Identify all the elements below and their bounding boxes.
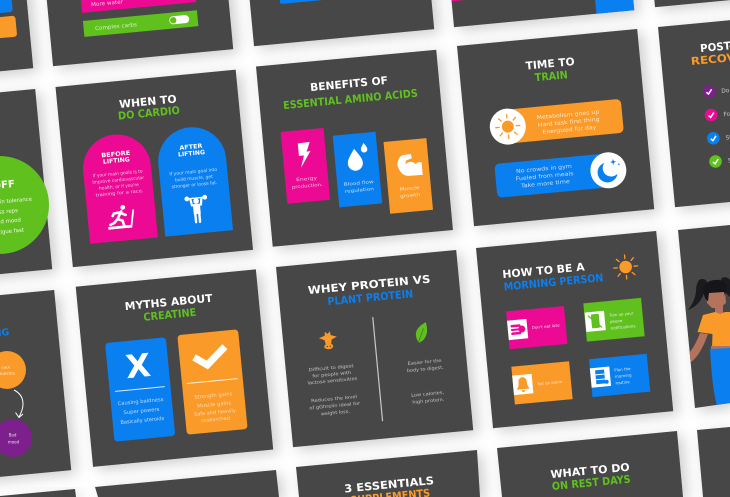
panel: how to be a morning person bbox=[476, 231, 673, 428]
blue myth card: Causing baldness bbox=[117, 397, 164, 407]
blue tile bbox=[592, 0, 634, 14]
purple circle bbox=[0, 419, 32, 457]
green row: complex carbs bbox=[83, 10, 198, 37]
panel: mood cycle card bbox=[0, 290, 71, 487]
blue arch: after lifting: AFTER bbox=[179, 143, 203, 152]
magenta tile: energy production bbox=[281, 128, 330, 204]
heading: 3 ESSENTIALS bbox=[344, 474, 435, 496]
icon: water drops bbox=[346, 143, 369, 171]
panel: day off card bbox=[0, 89, 52, 286]
purple circle text: Bad bbox=[9, 432, 17, 438]
heading: BENEFITS OF bbox=[310, 74, 388, 94]
green row: complex carbs: Complex carbs bbox=[95, 22, 137, 32]
orange fact card: Muscle gains bbox=[197, 400, 232, 410]
panel: bottom card bbox=[95, 470, 279, 497]
orange pill: morning bbox=[488, 98, 624, 146]
panel: what to do on rest days bbox=[497, 431, 683, 497]
tile: set an alarm: Set an alarm bbox=[537, 379, 563, 386]
orange pill: morning: Energized for day bbox=[542, 125, 597, 136]
right text bbox=[406, 358, 447, 406]
blue arch: after lifting: LIFTING bbox=[178, 149, 205, 159]
left text: Difficult to digest bbox=[308, 363, 354, 373]
illustration: woman with pigtails bbox=[688, 277, 730, 407]
heading: WHEY PROTEIN VS bbox=[307, 273, 431, 297]
blue tile: blood flow regulation: Blood flow bbox=[344, 179, 374, 188]
magenta tile bbox=[449, 0, 467, 1]
panel: far top-right cropped card bbox=[638, 0, 730, 7]
tile: turn up phone notifications: notifications bbox=[610, 323, 636, 331]
panel: top-centre cropped card bbox=[237, 0, 434, 46]
panel: benefits of essential amino acids bbox=[256, 50, 453, 247]
panel: 3 essentials bbox=[296, 450, 480, 497]
icon: weightlifter bbox=[184, 195, 209, 223]
divider line bbox=[372, 317, 383, 421]
panel: bottom-right cropped card bbox=[697, 427, 730, 497]
magenta arch: before lifting bbox=[80, 131, 158, 244]
subheading: DO CARDIO bbox=[117, 104, 180, 123]
left text bbox=[306, 363, 361, 418]
icon: moon bbox=[589, 151, 628, 190]
white tile bbox=[356, 0, 382, 1]
orange fact card: Strength gains bbox=[194, 391, 233, 401]
magenta arch: before lifting: health, or if you're bbox=[99, 182, 139, 192]
left text: weight loss. bbox=[321, 409, 350, 417]
left text: Reduces the level bbox=[311, 394, 357, 404]
orange tile: muscle growth: Muscle bbox=[399, 185, 420, 193]
panel: carbs list card bbox=[36, 0, 233, 66]
blue myth card bbox=[105, 337, 175, 442]
panel: whey protein vs plant protein bbox=[276, 250, 473, 447]
subheading: ESSENTIAL AMINO ACIDS bbox=[283, 87, 418, 112]
orange tile bbox=[0, 16, 17, 41]
panel: post-workout recovery bbox=[658, 10, 730, 207]
tile: set an alarm bbox=[511, 361, 573, 405]
blue tile: blood flow regulation bbox=[333, 132, 382, 207]
icon: lightning bolt bbox=[298, 142, 312, 168]
blue pill: evening: No crowds in gym bbox=[516, 164, 572, 175]
purple circle text bbox=[8, 432, 20, 444]
orange fact card bbox=[177, 329, 248, 435]
tile: turn up phone notifications: phone bbox=[610, 318, 623, 324]
tile: plan the morning routine bbox=[589, 354, 650, 397]
tile: plan the morning routine: morning bbox=[615, 372, 632, 379]
panel: time to train bbox=[457, 29, 654, 226]
left text: for people with bbox=[312, 370, 352, 380]
panel: top-right cropped card bbox=[437, 0, 634, 27]
icon: flexed arm bbox=[396, 153, 423, 177]
heading: TIME TO bbox=[525, 55, 575, 73]
subheading: PLANT PROTEIN bbox=[327, 287, 414, 308]
left text: lactose sensitivities bbox=[307, 376, 358, 387]
blue arch: after lifting: build muscle, get bbox=[175, 174, 213, 183]
arrow bbox=[14, 390, 23, 418]
orange circle text bbox=[0, 364, 16, 376]
blue myth card: Super powers bbox=[123, 407, 160, 416]
right text: high protein. bbox=[412, 397, 445, 406]
tile: don't eat late bbox=[506, 306, 567, 349]
purple circle text: mood bbox=[8, 440, 20, 444]
blue pill: evening: Take more time bbox=[520, 179, 571, 190]
panel: when to do cardio bbox=[56, 70, 253, 267]
checklist bbox=[702, 81, 730, 168]
blue myth card: X bbox=[124, 346, 153, 386]
icon: sun bbox=[488, 107, 527, 146]
orange pill: morning: Hard task first thing bbox=[538, 117, 600, 129]
subheading: ON REST DAYS bbox=[551, 473, 631, 493]
blue arch: after lifting: If your main goal into bbox=[169, 167, 218, 177]
blue arch: after lifting bbox=[155, 124, 233, 237]
magenta arch: before lifting: If your main goals is to bbox=[92, 169, 143, 179]
heading: WHAT TO DO bbox=[550, 461, 630, 481]
icon: bell bbox=[515, 377, 530, 393]
heading: WHEN TO bbox=[119, 92, 177, 111]
panel: myths about creatine bbox=[76, 269, 273, 467]
panel: bottom-left cropped card bbox=[0, 489, 76, 497]
orange circle text: Lack bbox=[2, 364, 11, 370]
orange fact card: researched bbox=[201, 416, 230, 424]
green circle bbox=[0, 156, 49, 254]
subheading: MORNING PERSON bbox=[503, 271, 604, 294]
orange tile: muscle growth: growth bbox=[400, 192, 421, 200]
subheading: TRAIN bbox=[534, 68, 568, 84]
right text: body to digest. bbox=[407, 365, 444, 374]
circle list bbox=[0, 196, 33, 236]
orange tile: muscle growth bbox=[384, 138, 433, 214]
icon: leaf bbox=[415, 322, 428, 344]
orange pill: morning: Metabolism goes up bbox=[536, 109, 600, 121]
left text: of gGhrelin ideal for bbox=[309, 401, 361, 411]
blue pill: evening bbox=[494, 151, 628, 199]
magenta arch: before lifting: LIFTING bbox=[103, 156, 130, 166]
tile: plan the morning routine: Plan the bbox=[614, 366, 631, 373]
tile: don't eat late: Don't eat late bbox=[532, 322, 560, 330]
magenta arch: before lifting: training for a race. bbox=[95, 188, 144, 199]
blue myth card: Basically steroids bbox=[120, 416, 165, 426]
tile: plan the morning routine: routine bbox=[615, 379, 630, 385]
magenta arch: before lifting: BEFORE bbox=[101, 150, 131, 159]
magenta tile: energy production: Energy bbox=[296, 175, 318, 183]
tile: turn up phone notifications: Turn up your bbox=[608, 310, 634, 318]
heading: HOW TO BE A bbox=[502, 260, 586, 281]
magenta row: more water bbox=[79, 0, 196, 13]
magenta tile: energy production: production. bbox=[292, 182, 323, 191]
heading: MYTHS ABOUT bbox=[124, 292, 214, 313]
icon: sun bbox=[613, 254, 639, 280]
blue pill: evening: Fueled from meals bbox=[516, 171, 574, 183]
blue tile bbox=[0, 0, 13, 16]
icon: treadmill runner bbox=[106, 204, 135, 228]
right text: Easier for the bbox=[407, 358, 442, 367]
icon: cow bbox=[318, 331, 338, 350]
tile: turn up phone notifications bbox=[583, 298, 645, 342]
blue arch: after lifting: stronger or loose fat. bbox=[171, 180, 218, 190]
right text: Low calories, bbox=[411, 390, 444, 399]
orange circle bbox=[0, 351, 26, 389]
orange fact card: Safe and heavily bbox=[194, 408, 236, 418]
blue tile: blood flow regulation: regulation bbox=[345, 186, 374, 195]
panel: top-left cropped card bbox=[0, 0, 33, 85]
magenta arch: before lifting: improve cardiovascular bbox=[92, 175, 145, 186]
panel: character card bbox=[678, 225, 730, 408]
subheading: CREATINE bbox=[143, 306, 197, 324]
blue tile bbox=[277, 0, 328, 4]
icon: check mark bbox=[193, 347, 227, 366]
